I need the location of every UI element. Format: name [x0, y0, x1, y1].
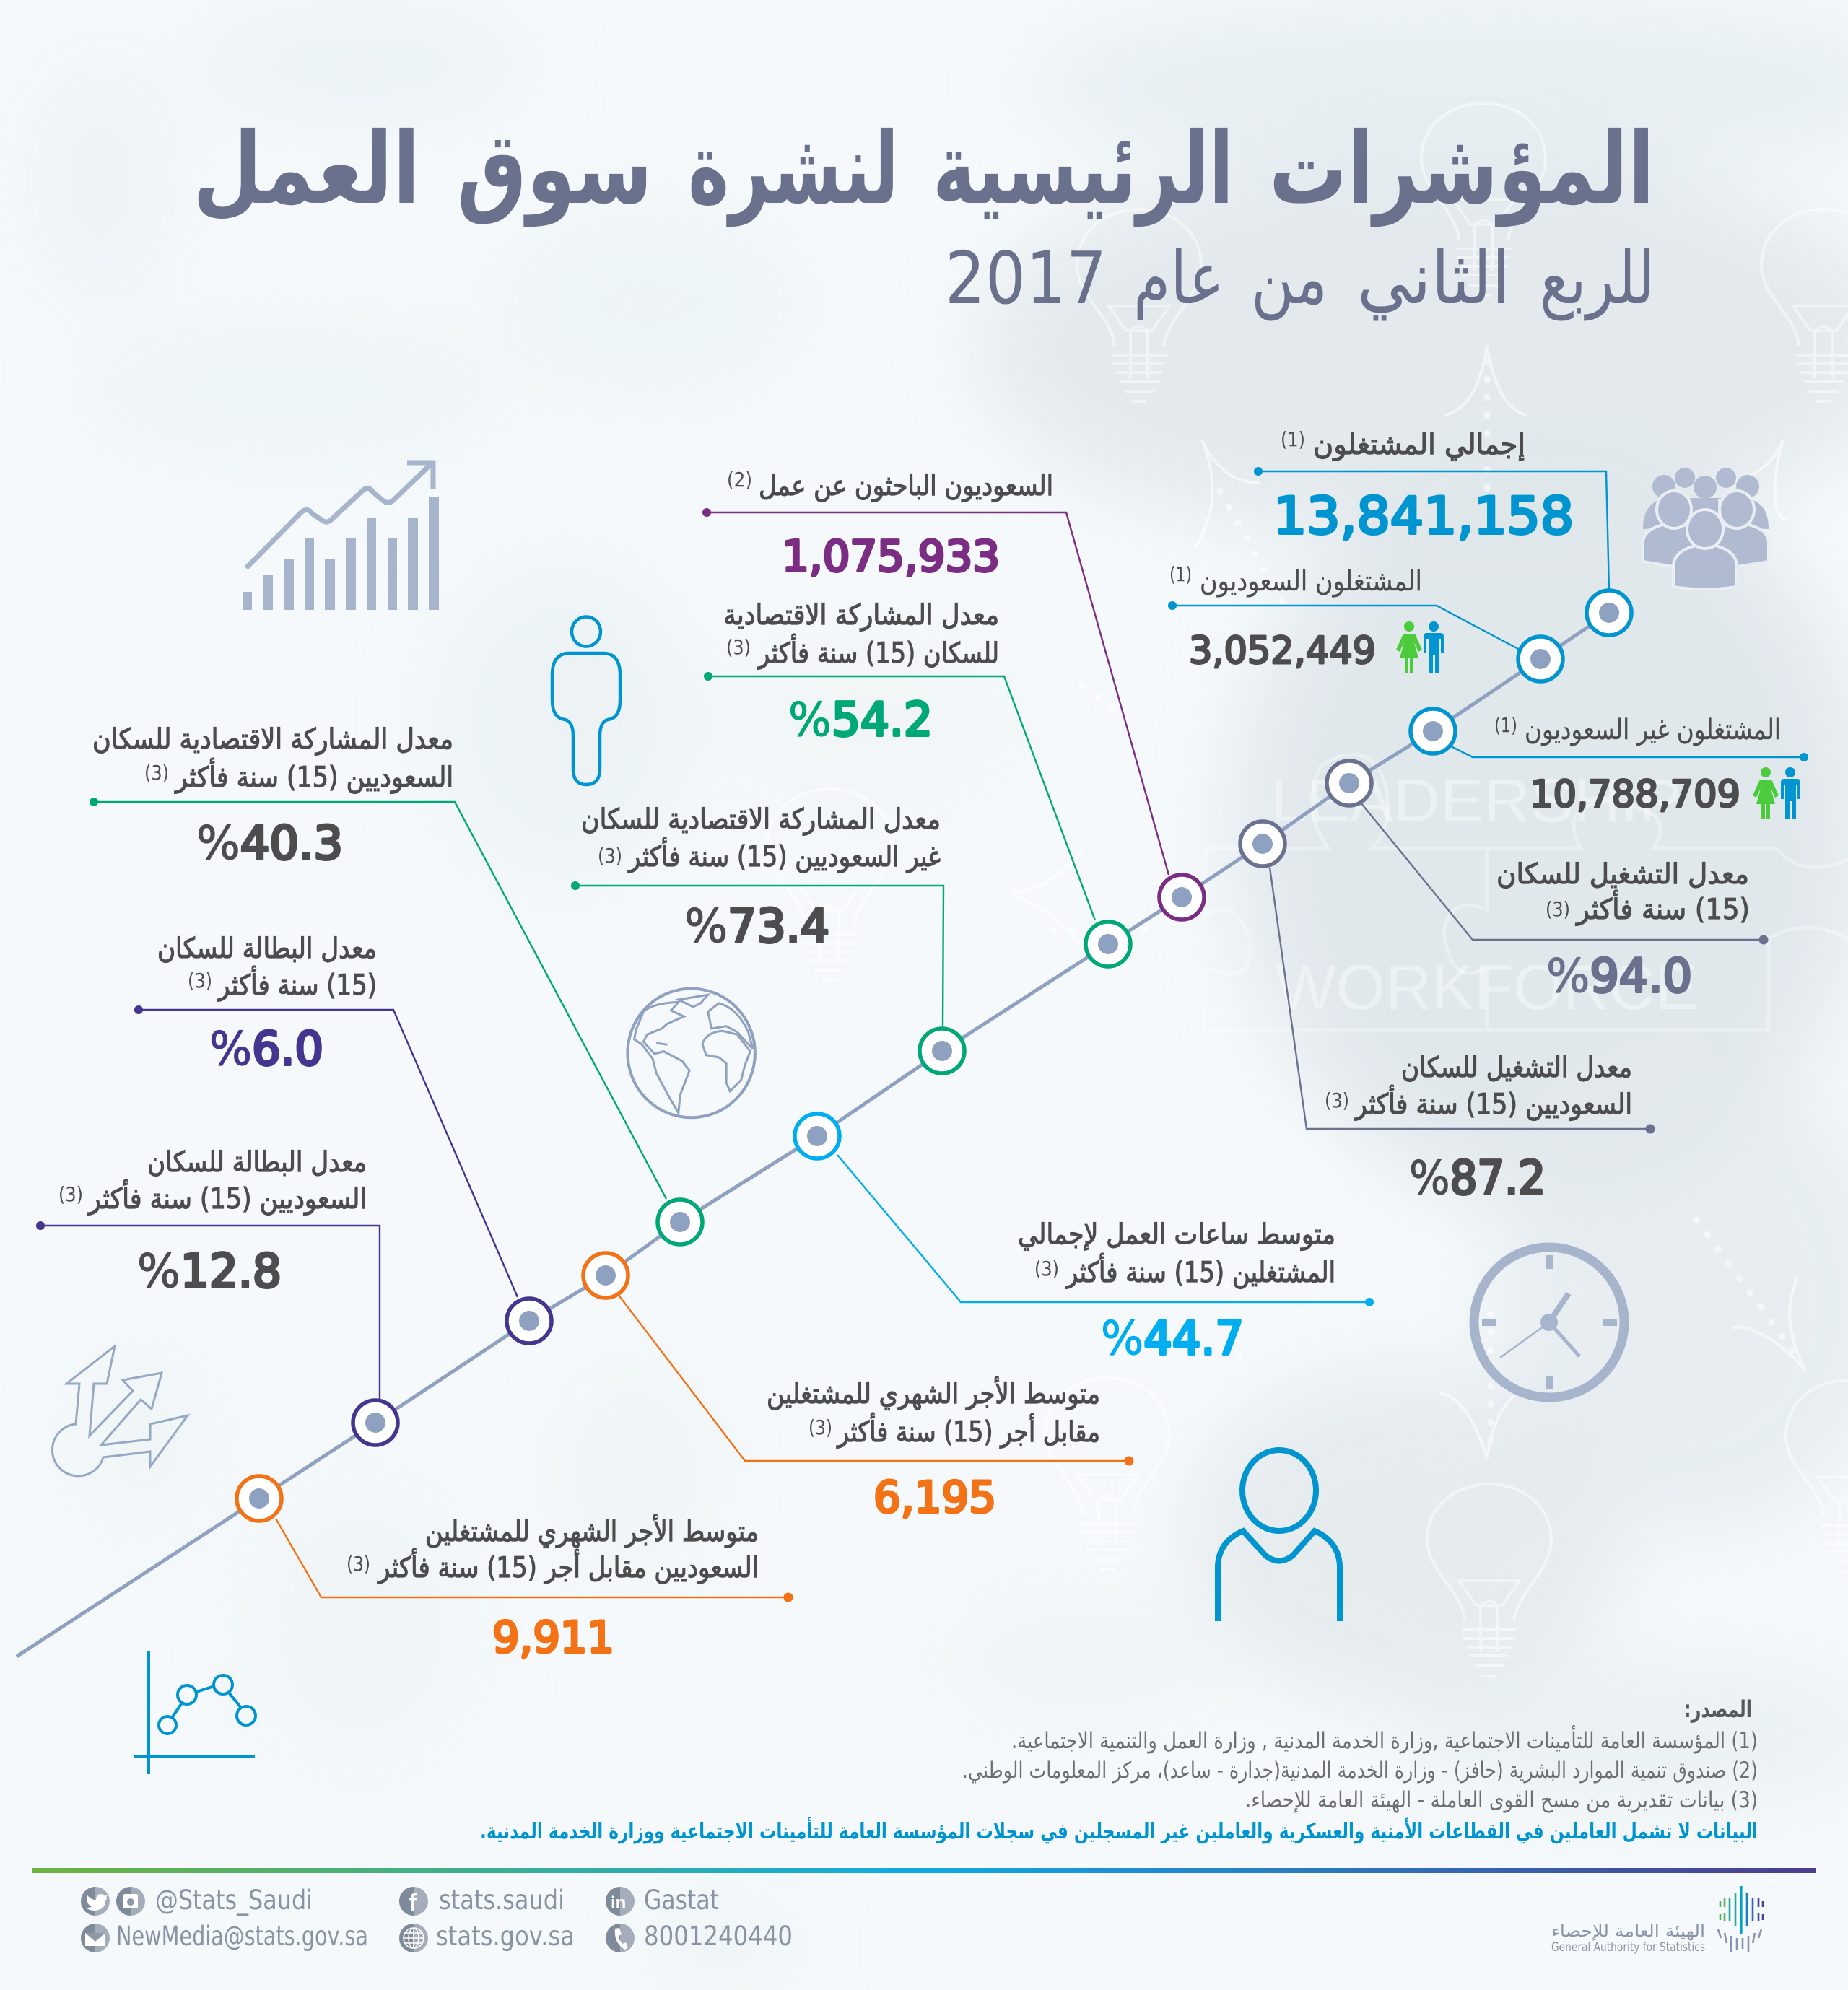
metric: Saudi employed: المشتغلون السعوديون [1200, 565, 1422, 598]
icon: woman and man [1753, 767, 1800, 819]
metric: monthly wage 6,195: مقابل أجر (15) سنة فأكثر [836, 1413, 1100, 1449]
icon: woman and man [1396, 621, 1444, 673]
title: سوق [457, 112, 653, 227]
metric: Saudi unemployment 12.8: معدل البطالة للسكان [147, 1146, 367, 1179]
metric: participation 54.2: (3) [726, 635, 751, 659]
icon: person bust [1218, 1450, 1340, 1621]
metric: working hours 44.7: %44.7 [1101, 1312, 1244, 1366]
metric: Saudi monthly wage 9,911 [237, 1476, 793, 1663]
metric: working hours 44.7: (3) [1034, 1257, 1059, 1280]
sources: (3) بيانات تقديرية من مسح القوى العاملة - الهيئة العامة للإحصاء. [1245, 1787, 1758, 1813]
sources: المصدر: [1684, 1696, 1752, 1723]
metric: working hours 44.7 [795, 1114, 1374, 1366]
text: WORKFORCE [1276, 951, 1698, 1023]
metric: participation Saudi 40.3: (3) [144, 761, 169, 785]
subtitle: للربع [1540, 236, 1655, 321]
metric: unemployment 6.0: معدل البطالة للسكان [157, 933, 377, 965]
metric: unemployment 6.0: %6.0 [209, 1023, 323, 1076]
metric: total employed: إجمالي المشتغلون [1313, 429, 1525, 461]
logo: General Authority for Statistics: الهيئة العامة للإحصاء [1551, 1922, 1705, 1941]
logo: General Authority for Statistics [1551, 1886, 1763, 1955]
metric: job seekers: السعوديون الباحثون عن عمل [759, 470, 1053, 502]
metric: non-Saudi employed: المشتغلون غير السعوديون [1525, 714, 1781, 746]
subtitle: الثاني [1357, 236, 1510, 321]
metric: participation 54.2 [704, 599, 1130, 966]
title [193, 112, 1655, 227]
metric: Saudi employed: 3,052,449 [1189, 629, 1376, 673]
metric: participation non-Saudi 73.4 [571, 803, 964, 1073]
footer contacts: NewMedia@stats.gov.sa [116, 1921, 368, 1952]
icon: facebook [399, 1887, 428, 1917]
metric: Saudi employment rate 87.2 [1240, 821, 1655, 1205]
metric: Saudi employment rate 87.2: معدل التشغيل للسكان [1401, 1052, 1632, 1084]
icon: web globe [399, 1924, 428, 1952]
footer contacts: Gastat [644, 1885, 719, 1916]
icon: instagram [116, 1887, 145, 1916]
text: LEADERSHIP [1270, 767, 1682, 834]
metric: Saudi unemployment 12.8: (3) [58, 1182, 83, 1206]
footer contacts: @Stats_Saudi [155, 1885, 313, 1916]
metric: Saudi unemployment 12.8 [36, 1146, 398, 1445]
icon: bar chart with rising arrow [243, 462, 439, 610]
metric: total employed [1254, 427, 1631, 635]
metric: participation Saudi 40.3: السعوديين (15) سنة فأكثر [174, 758, 453, 794]
metric: Saudi employment rate 87.2: %87.2 [1409, 1152, 1546, 1205]
metric: participation 54.2: معدل المشاركة الاقتصادية [723, 599, 999, 632]
metric: job seekers [702, 468, 1204, 920]
metric: total employed: 13,841,158 [1273, 486, 1574, 546]
metric: Saudi monthly wage 9,911: السعوديين مقابل أجر (15) سنة فأكثر [377, 1548, 759, 1584]
icon: phone [606, 1924, 635, 1952]
icon: group of people [1643, 468, 1769, 589]
subtitle: 2017 [945, 236, 1107, 320]
metric: participation non-Saudi 73.4: معدل المشاركة الاقتصادية للسكان [581, 803, 941, 836]
footer contacts: 8001240440 [644, 1921, 793, 1952]
metric: employment rate 94.0: (3) [1546, 897, 1570, 921]
sources [480, 1696, 1758, 1844]
icon: clock [1474, 1247, 1624, 1397]
title: المؤشرات [1269, 112, 1655, 227]
metric: non-Saudi employed: 10,788,709 [1530, 773, 1740, 816]
metric: employment rate 94.0 [1327, 761, 1769, 1003]
subtitle: عام [1133, 236, 1224, 320]
metric: participation 54.2: %54.2 [788, 694, 933, 747]
metric: non-Saudi employed: (1) [1494, 713, 1517, 737]
metric: job seekers: (2) [727, 468, 752, 492]
metric: Saudi monthly wage 9,911: 9,911 [492, 1612, 614, 1663]
metric: monthly wage 6,195: (3) [808, 1415, 832, 1439]
icon: standing person outline [552, 616, 620, 785]
icon: line chart [134, 1651, 256, 1774]
icon: branching arrows [52, 1346, 188, 1476]
trend line [17, 613, 1609, 1657]
logo: General Authority for Statistics: General Authority for Statistics [1551, 1940, 1705, 1955]
title: العمل [193, 112, 420, 227]
metric: Saudi employed [1168, 562, 1563, 681]
metric: Saudi unemployment 12.8: السعوديين (15) سنة فأكثر [87, 1179, 367, 1216]
metric: participation 54.2: للسكان (15) سنة فأكثر [757, 634, 999, 670]
metric: participation non-Saudi 73.4: %73.4 [684, 900, 829, 953]
metric: monthly wage 6,195: 6,195 [873, 1472, 996, 1523]
title: لنشرة [688, 112, 899, 227]
metric: Saudi employment rate 87.2: (3) [1325, 1088, 1349, 1112]
metric: employment rate 94.0: (15) سنة فأكثر [1575, 890, 1750, 926]
metric: employment rate 94.0: معدل التشغيل للسكان [1496, 858, 1749, 891]
icon: linkedin: in [611, 1893, 626, 1913]
icon: facebook: f [409, 1890, 417, 1917]
metric: non-Saudi employed [1411, 709, 1808, 819]
icon: globe [627, 989, 755, 1117]
metric: working hours 44.7: متوسط ساعات العمل لإجمالي [1018, 1218, 1335, 1251]
metric: Saudi unemployment 12.8: %12.8 [137, 1245, 282, 1299]
metric: employment rate 94.0: %94.0 [1546, 950, 1692, 1003]
metric: participation Saudi 40.3: %40.3 [196, 817, 343, 870]
metric: Saudi employed: (1) [1169, 562, 1192, 586]
footer contacts: stats.saudi [439, 1885, 565, 1916]
footer contacts: stats.gov.sa [436, 1921, 575, 1952]
metric: Saudi monthly wage 9,911: متوسط الأجر الشهري للمشتغلين [425, 1514, 759, 1548]
gradient divider [32, 1868, 1816, 1873]
icon: twitter [81, 1887, 110, 1916]
metric: monthly wage 6,195 [583, 1253, 1133, 1523]
metric: monthly wage 6,195: متوسط الأجر الشهري للمشتغلين [767, 1376, 1100, 1410]
icon: linkedin [606, 1887, 635, 1916]
subtitle: من [1251, 236, 1328, 321]
metric: participation non-Saudi 73.4: (3) [598, 844, 622, 868]
metric: unemployment 6.0 [134, 933, 552, 1343]
metric: participation Saudi 40.3 [90, 723, 702, 1244]
metric: participation non-Saudi 73.4: غير السعوديين (15) سنة فأكثر [627, 837, 941, 873]
title: الرئيسية [933, 112, 1234, 227]
metric: Saudi monthly wage 9,911: (3) [346, 1552, 370, 1576]
footer contacts [81, 1885, 793, 1952]
metric: Saudi employment rate 87.2: السعوديين (15) سنة فأكثر [1354, 1085, 1632, 1121]
metric: working hours 44.7: المشتغلين (15) سنة فأكثر [1065, 1253, 1335, 1289]
metric: participation Saudi 40.3: معدل المشاركة الاقتصادية للسكان [92, 723, 453, 756]
metric: unemployment 6.0: (3) [188, 969, 212, 992]
metric: total employed: (1) [1281, 427, 1305, 451]
metric: unemployment 6.0: (15) سنة فأكثر [217, 966, 377, 1002]
subtitle [945, 236, 1655, 321]
metric: job seekers: 1,075,933 [782, 531, 1000, 581]
icon: envelope [81, 1924, 110, 1952]
